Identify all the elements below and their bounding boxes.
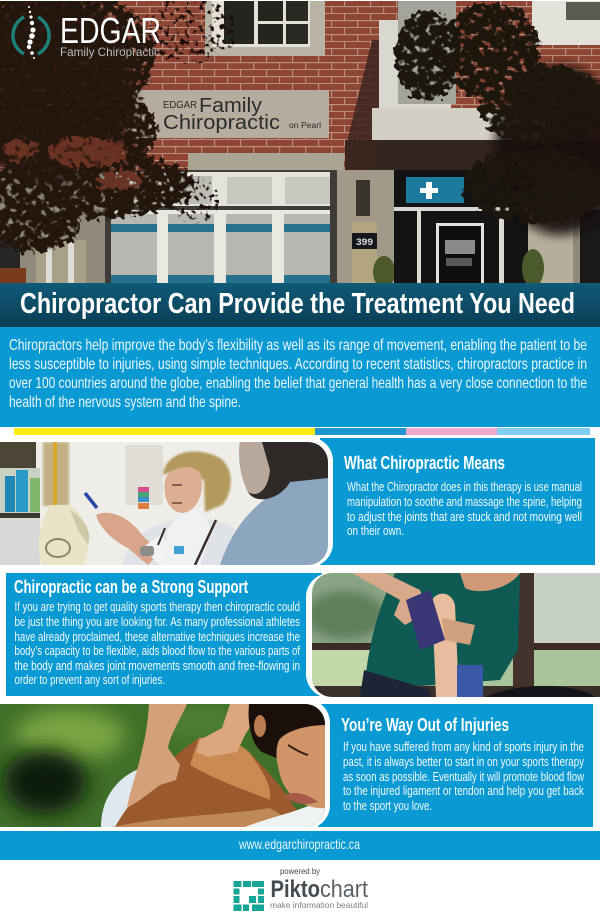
logo: Edgar Family Chiropractic: Family Chiropractic <box>60 45 160 59</box>
photo: therapist stretching a leg <box>305 573 600 698</box>
Piktochart credit: powered by <box>280 867 320 876</box>
building sign: Family <box>199 95 262 117</box>
panel: Chiropractic can be a Strong Support: be just the thing you are looking for. As many professional athletes <box>14 614 300 629</box>
colour stripe divider <box>14 428 590 435</box>
photo: doctor explaining spine model <box>0 437 333 567</box>
panel: Chiropractic can be a Strong Support: If you are trying to get quality sports therapy then chiropractic could <box>14 599 300 614</box>
building sign <box>126 90 329 138</box>
building sign: Chiropractic <box>163 112 280 134</box>
panel: You're Way Out of Injuries <box>318 704 593 827</box>
header photo: clinic building <box>0 0 600 288</box>
panel: Chiropractic can be a Strong Support: have already proclaimed, these alternative techniques increase the <box>14 629 300 644</box>
logo: Edgar Family Chiropractic: EDGAR <box>60 10 161 51</box>
icon: Piktochart mark <box>234 881 264 911</box>
panel: You're Way Out of Injuries: You’re Way Out of Injuries <box>341 715 509 735</box>
building sign: on Pearl <box>289 121 321 130</box>
panel: What Chiropractic Means: What Chiropractic Means <box>344 453 505 473</box>
panel: What Chiropractic Means: on their own. <box>347 523 404 538</box>
right tree <box>395 2 600 235</box>
photo: shoulder massage <box>0 699 330 829</box>
intro panel <box>0 327 600 427</box>
Piktochart credit: Pikto <box>270 876 320 903</box>
Piktochart credit <box>234 867 368 911</box>
panel: What Chiropractic Means <box>320 438 595 565</box>
left tree <box>0 0 238 252</box>
panel: Chiropractic can be a Strong Support: body’s capacity to be flexible, aids blood flow to the various parts of <box>14 643 300 658</box>
header photo: clinic building: 399 <box>356 237 373 247</box>
panel: Chiropractic can be a Strong Support <box>6 573 322 696</box>
panel: You're Way Out of Injuries: to the sport you love. <box>343 798 432 813</box>
Piktochart credit: chart <box>320 876 368 903</box>
panel: Chiropractic can be a Strong Support: order to prevent any sort of injuries. <box>14 672 165 687</box>
panel: Chiropractic can be a Strong Support: the body and makes joint movements smooth and free-flowing in <box>14 658 300 673</box>
footer band with website: www.edgarchiropractic.ca <box>238 836 360 852</box>
Piktochart credit: make information beautiful <box>270 901 368 910</box>
icon: spine in teal ring <box>13 6 49 59</box>
building sign: EDGAR <box>163 100 197 111</box>
intro panel: health of the nervous system and the spine. <box>9 394 241 411</box>
footer band with website <box>0 831 600 860</box>
logo: Edgar Family Chiropractic <box>13 6 161 59</box>
panel: Chiropractic can be a Strong Support: Chiropractic can be a Strong Support <box>14 577 248 597</box>
